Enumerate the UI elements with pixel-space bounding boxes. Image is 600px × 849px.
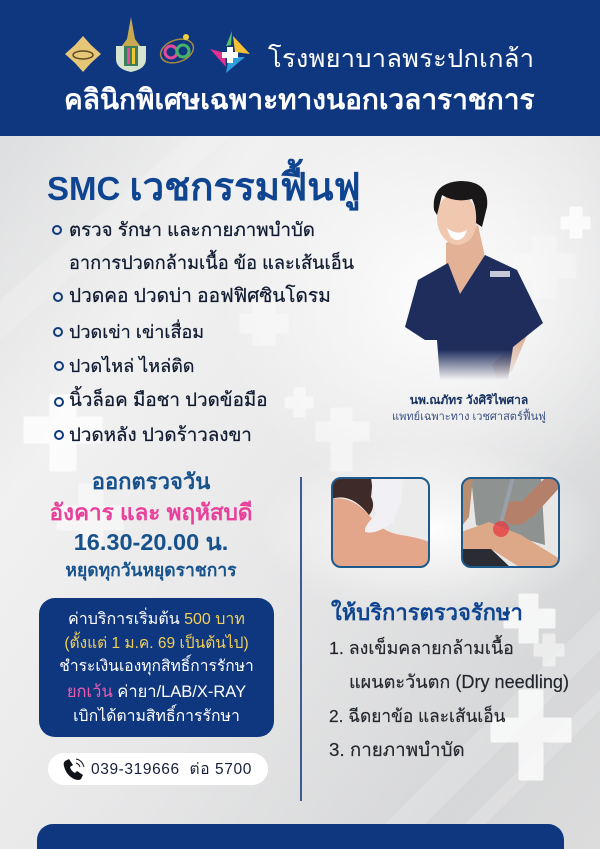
icon: hospital emblem: [65, 36, 101, 72]
symptom bullets: [52, 225, 64, 440]
services heading: ให้บริการตรวจรักษา: [331, 600, 523, 625]
fee line 4: ยกเว้น ค่ายา/LAB/X-RAY: [67, 683, 246, 701]
doctor photo: [405, 181, 543, 379]
phone number: 039-319666 ต่อ 5700: [91, 761, 252, 778]
symptom text 1: ตรวจ รักษา และกายภาพบำบัด: [69, 219, 315, 240]
panel: fees: [39, 598, 274, 737]
symptom text 6: ปวดหลัง ปวดร้าวลงขา: [69, 424, 252, 445]
icon: phone: [64, 758, 84, 780]
symptom text 2: ปวดคอ ปวดบ่า ออฟฟิศซินโดรม: [69, 286, 331, 307]
service 1: 1. ลงเข็มคลายกล้ามเนื้อ: [329, 638, 514, 658]
service 3: 3. กายภาพบำบัด: [329, 739, 465, 760]
photo: dry needling: [331, 477, 430, 568]
service 1 continued: แผนตะวันตก (Dry needling): [349, 672, 569, 692]
fee line 3: ชำระเงินเองทุกสิทธิ์การรักษา: [59, 658, 254, 675]
divider: [300, 477, 302, 801]
symptom text 1 continued: อาการปวดกล้ามเนื้อ ข้อ และเส้นเอ็น: [69, 253, 354, 273]
hospital name: โรงพยาบาลพระปกเกล้า: [268, 45, 534, 73]
fee line 1: ค่าบริการเริ่มต้น 500 บาท: [68, 611, 245, 628]
symptom text 3: ปวดเข่า เข่าเสื่อม: [69, 322, 204, 342]
doctor title: แพทย์เฉพาะทาง เวชศาสตร์ฟื้นฟู: [392, 411, 546, 423]
icon: clinic star logo: [210, 31, 250, 73]
photo: laser therapy: [461, 477, 560, 568]
symptom text 5: นิ้วล็อค มือชา ปวดข้อมือ: [69, 389, 268, 410]
icon: royal emblem: [116, 17, 146, 72]
header band: [0, 0, 600, 136]
schedule hours: 16.30-20.00 น.: [74, 529, 228, 555]
schedule heading: ออกตรวจวัน: [92, 469, 210, 494]
footer panel: [37, 824, 564, 849]
holiday note: หยุดทุกวันหยุดราชการ: [65, 560, 237, 580]
phone pill: [48, 753, 268, 785]
schedule days: อังคาร และ พฤหัสบดี: [49, 500, 253, 525]
doctor name: นพ.ณภัทร วังศิริไพศาล: [410, 393, 528, 407]
fee line 5: เบิกได้ตามสิทธิ์การรักษา: [73, 708, 240, 725]
icon: anniversary emblem: [160, 34, 194, 64]
service 2: 2. ฉีดยาข้อ และเส้นเอ็น: [329, 706, 505, 726]
symptom text 4: ปวดไหล่ ไหล่ติด: [69, 356, 194, 376]
clinic heading: คลินิกพิเศษเฉพาะทางนอกเวลาราชการ: [64, 84, 535, 115]
fee line 2: (ตั้งแต่ 1 ม.ค. 69 เป็นต้นไป): [64, 635, 249, 652]
service title: SMC เวชกรรมฟื้นฟู: [47, 166, 361, 209]
